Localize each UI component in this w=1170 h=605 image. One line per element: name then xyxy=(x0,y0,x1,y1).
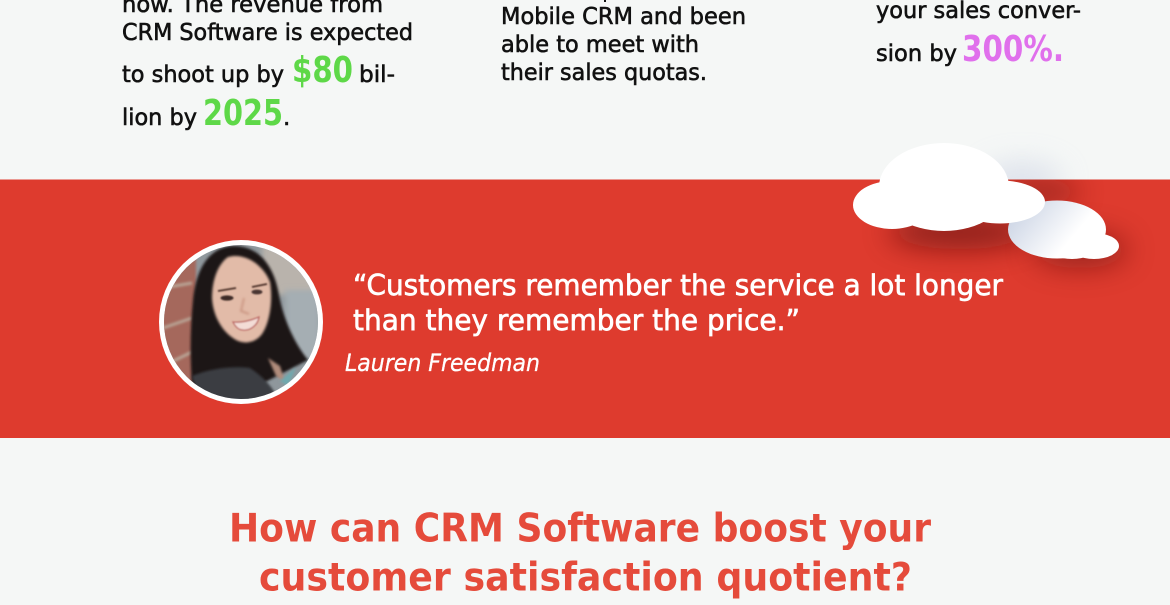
stat: CRM revenue: CRM Software is expected xyxy=(122,20,413,46)
section heading: How can CRM Software boost your xyxy=(229,506,931,552)
stat: sales conversion: sion by xyxy=(876,41,957,67)
stat: CRM revenue: $80 xyxy=(292,50,353,91)
portrait: Lauren Freedman xyxy=(159,240,325,405)
quote text: “Customers remember the service a lot longer xyxy=(353,269,1003,302)
stat: sales conversion: 300%. xyxy=(962,29,1064,70)
stat: Mobile CRM sales quotas: their sales quotas. xyxy=(501,60,707,86)
quote attribution: Lauren Freedman xyxy=(345,349,540,377)
stat: CRM revenue xyxy=(122,0,413,134)
icon: clouds xyxy=(853,143,1128,268)
quote text: than they remember the price.” xyxy=(353,304,800,337)
stat: CRM revenue: bil- xyxy=(359,62,395,88)
stat: CRM revenue: to shoot up by xyxy=(122,62,284,88)
stat: CRM revenue: lion by xyxy=(122,105,197,131)
quote text xyxy=(353,269,1003,337)
stat: Mobile CRM sales quotas: able to meet with xyxy=(501,32,699,58)
stat: Mobile CRM sales quotas: Mobile CRM and been xyxy=(501,4,746,30)
stat: Mobile CRM sales quotas xyxy=(501,0,746,86)
stat: CRM revenue: 2025 xyxy=(203,93,283,134)
section heading: customer satisfaction quotient? xyxy=(259,554,912,600)
quote band xyxy=(0,180,1170,438)
stat: CRM revenue: . xyxy=(283,105,290,131)
section heading xyxy=(229,506,931,600)
stat: sales conversion xyxy=(876,0,1081,70)
